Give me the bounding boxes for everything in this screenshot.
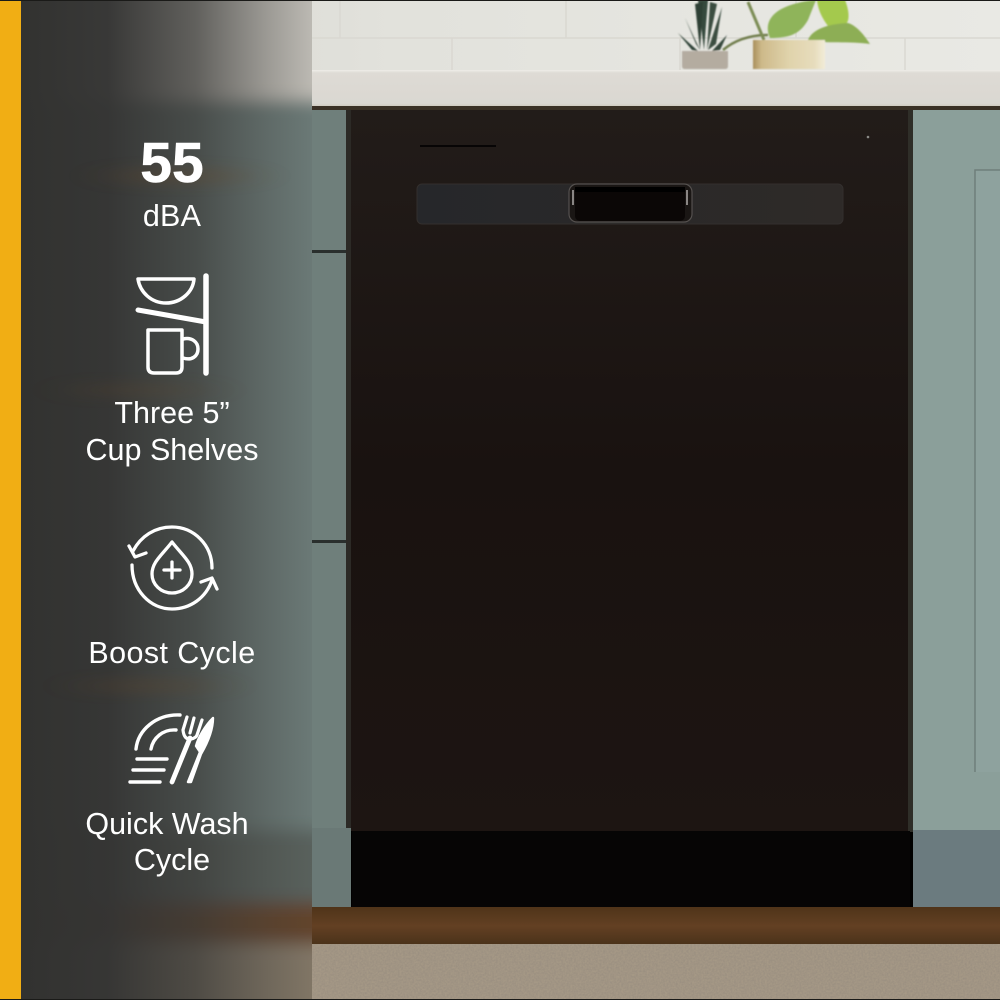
icon: bowl and mug on shelf [138, 276, 206, 373]
toe kick [352, 831, 910, 907]
label: quick wash cycle: Cycle [134, 843, 210, 877]
left cabinets [312, 110, 351, 908]
side panel [10, 0, 320, 1000]
icon: water drop with cycle arrows [129, 527, 217, 609]
right cabinet [908, 110, 1000, 912]
feature: 55 dBA [140, 131, 204, 233]
dishwasher [351, 110, 910, 907]
label: quick wash cycle: Quick Wash [85, 807, 249, 841]
rug [312, 944, 1000, 1000]
potted green plant [723, 0, 870, 69]
label: boost cycle: Boost Cycle [88, 636, 256, 670]
noise value: 55 [140, 131, 204, 195]
label: three cup shelves: Three 5” [114, 396, 230, 430]
control strip [417, 184, 843, 224]
door handle [569, 184, 692, 222]
indicator light [867, 136, 869, 138]
icon: plate and cutlery [130, 715, 213, 782]
wood floor [312, 907, 1000, 945]
top trim line [420, 145, 496, 147]
accent bar [0, 0, 21, 1000]
label: three cup shelves: Cup Shelves [86, 433, 258, 467]
feature: cup shelves [86, 276, 258, 467]
potted succulent [678, 0, 728, 69]
feature: quick wash [85, 715, 249, 877]
noise unit: dBA [143, 199, 202, 233]
dishwasher door [351, 110, 908, 831]
countertop [312, 70, 1000, 110]
feature: boost cycle [88, 527, 256, 670]
kitchen wall with tiles [0, 0, 1000, 72]
